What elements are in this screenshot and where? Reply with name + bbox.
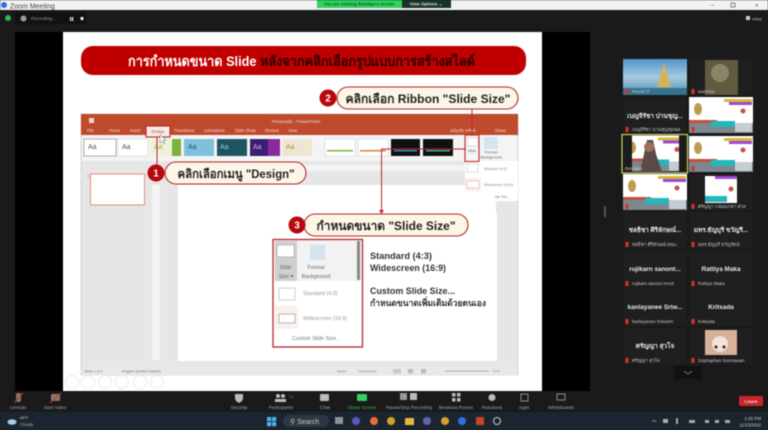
slide size explanation text — [370, 251, 486, 308]
Slide Size button highlight — [465, 135, 479, 162]
tile: active speaker Benidpa — [622, 134, 688, 173]
vertical ruler — [152, 185, 160, 360]
icon: Windows start — [267, 417, 276, 426]
tile: Rattiya Maka: Rattiya Maka — [698, 281, 725, 286]
slide size explanation text: Custom Slide Size... — [370, 286, 455, 296]
tile: wanvisa — [689, 59, 753, 95]
participant tiles — [622, 59, 753, 364]
ribbon with theme thumbnails — [82, 135, 517, 161]
search box — [283, 415, 329, 427]
icon: security: Security — [231, 405, 248, 410]
enlarged Slide Size menu: Custom Slide Size... — [292, 336, 341, 342]
icon: reactions — [482, 394, 503, 410]
tile: kanlayanee — [623, 289, 687, 326]
taskbar app icons — [335, 417, 500, 425]
callout 1: Design: คลิกเลือกเมนู "Design" — [178, 167, 294, 182]
tile: ศรัญญา — [623, 328, 687, 364]
slide size dropdown in PowerPoint — [465, 161, 518, 213]
callout 3: Slide Size: กำหนดขนาด "Slide Size" — [316, 219, 456, 233]
horizontal ruler — [178, 165, 466, 171]
tile: Kritsada — [689, 289, 753, 326]
icon: participants — [269, 394, 294, 410]
PowerPoint title bar: ธนัญชัย ทรัพย์ — [450, 128, 476, 133]
tile: Rattiya Maka — [689, 251, 753, 288]
leave button: Leave — [744, 399, 758, 404]
icon: pause stop recording — [386, 393, 432, 410]
tile: เบญจีรัชา: เบญจีรัชา ปานชุญ... — [627, 112, 683, 120]
window title bar — [0, 0, 768, 10]
icon: whiteboards: Whiteboards — [548, 405, 575, 410]
callout 2: Ribbon Slide Size: 2 — [325, 94, 331, 104]
icon: security — [231, 394, 248, 410]
PowerPoint title bar: Animations — [204, 128, 225, 133]
tile: Kritsada: Kritsada — [698, 319, 715, 324]
icon: unmute — [10, 393, 26, 410]
weather — [8, 415, 34, 427]
icon: participants: 71 — [289, 394, 294, 399]
tile: Rmutt IT: Rmutt IT — [632, 89, 650, 94]
tile: slide share 3 — [623, 174, 687, 210]
slide size dropdown in PowerPoint: Widescreen (16:9) — [484, 183, 513, 187]
tile: Rmutt IT — [623, 59, 687, 95]
icon: participants: Participants — [269, 405, 294, 410]
tile: เบญจีรัชา — [623, 97, 687, 133]
icon: pause stop recording: Pause/Stop Recording — [386, 405, 432, 410]
screen share banner: View Options ⌄ — [410, 2, 442, 6]
status bar: Comments — [358, 370, 376, 374]
slide size explanation text: Standard (4:3) — [370, 251, 432, 261]
PowerPoint title bar: View — [288, 128, 298, 133]
icon: chat: Chat — [320, 405, 331, 410]
connector lines — [157, 109, 472, 212]
icon: breakout rooms: Breakout Rooms — [439, 405, 474, 410]
clock: 1:25 PM — [745, 416, 761, 421]
status bar — [82, 367, 517, 375]
system tray — [652, 418, 730, 424]
icon: apps: Apps — [519, 405, 530, 410]
slide thumbnail pane — [87, 173, 144, 205]
shared screen letterbox — [15, 32, 206, 391]
PowerPoint window — [81, 114, 518, 375]
enlarged Slide Size menu: Standard (4:3) — [303, 291, 338, 297]
PowerPoint title bar — [81, 114, 518, 135]
callout 3: Slide Size: 3 — [294, 220, 300, 232]
clock: 11/23/2022 — [739, 422, 762, 428]
tile: kanlayanee: kanlayanee Sriw... — [628, 304, 683, 311]
callout 1: Design: 1 — [153, 168, 159, 180]
recording status bar: View — [752, 16, 763, 22]
ribbon with theme thumbnails: Background — [480, 154, 502, 160]
screen share banner — [317, 0, 451, 8]
tile: มทร.ธัญบุรี: มทร.ธัญบุรี ขวัญรี... — [694, 226, 748, 234]
slide thumbnail pane: 1 — [87, 173, 90, 178]
callout 2: Ribbon Slide Size — [320, 87, 518, 109]
tile: rujikarn: rujikarn sanont... — [629, 266, 681, 273]
tile: ศรัญญา: ศรัญญา สุวโจ — [636, 341, 674, 350]
tile: slide share 4 — [689, 174, 753, 210]
window title bar: Zoom Meeting — [10, 4, 55, 10]
presenter tools — [66, 376, 164, 388]
icon: reactions: Reactions — [482, 405, 503, 410]
tile: ชลธิชา — [623, 212, 687, 248]
meeting toolbar — [0, 391, 768, 412]
icon: whiteboards — [548, 394, 575, 410]
tile: kanlayanee: kanlayanee Sriwarin — [632, 319, 674, 324]
clock — [739, 416, 762, 428]
Slide Size small label: Slide — [468, 149, 476, 153]
ribbon with theme thumbnails: Aa — [122, 144, 131, 151]
icon: share screen: Share Screen — [348, 405, 376, 410]
callout 1: Design — [148, 162, 306, 184]
icon: apps — [519, 394, 530, 410]
slide — [63, 32, 542, 391]
participants panel divider handle — [604, 206, 606, 217]
scroll down chevron — [674, 366, 702, 379]
tile: เบญจีรัชา: เบญจีรัชา ปานชุญชุมพล — [632, 126, 680, 133]
enlarged Slide Size menu: Widescreen (16:9) — [303, 316, 347, 322]
status bar: Slide 1 of 1 — [84, 370, 103, 374]
ribbon with theme thumbnails: Aa — [286, 144, 295, 151]
slide size explanation text: Widescreen (16:9) — [370, 263, 446, 273]
icon: breakout rooms — [439, 393, 474, 410]
status bar: 71% — [492, 370, 500, 374]
enlarged Slide Size menu — [273, 240, 362, 347]
PowerPoint title bar: Home — [109, 128, 121, 133]
tile: Kritsada: Kritsada — [708, 304, 734, 311]
icon: start video: Start Video — [44, 405, 67, 410]
PowerPoint title bar: File — [87, 128, 94, 133]
icon: start video — [44, 393, 67, 410]
tile: ชลธิชา: ชลธิชา ศิริลักษณ์... — [629, 226, 682, 234]
slide size explanation text: กำหนดขนาดเพิ่มเติมด้วยตนเอง — [370, 296, 486, 308]
ribbon with theme thumbnails: Format — [485, 150, 498, 154]
tile: slide share 2 — [689, 136, 753, 172]
tile: Sophaphan — [689, 328, 753, 364]
tile: มทร.ธัญบุรี: มทร.ธัญบุรี ขวัญรัตน์ — [698, 241, 740, 248]
slide title banner — [81, 46, 526, 75]
icon: share screen — [348, 394, 376, 410]
weather: 68°F — [20, 415, 29, 420]
tile: rujikarn: rujikarn sanont rmutt — [632, 281, 675, 286]
weather: Cloudy — [20, 422, 34, 427]
ribbon with theme thumbnails: Aa — [188, 144, 197, 151]
tile: ชลธิชา: ชลธิชา ศิริลักษณ์ คณะ — [632, 241, 678, 247]
callout 3: Slide Size — [288, 214, 468, 236]
enlarged Slide Size menu: Background — [302, 274, 330, 280]
slide title banner: การกำหนดขนาด Slide หลังจากคลิกเลือกรูปแบบการสร้างสไลด์ — [128, 52, 475, 70]
screen share banner: You are viewing Benidpa's screen — [324, 2, 395, 6]
ribbon with theme thumbnails: Aa — [220, 144, 229, 151]
tile: Sophaphan: Sophaphan Somsasan — [698, 358, 745, 363]
ribbon with theme thumbnails: Aa — [253, 144, 262, 151]
icon: chat — [320, 394, 331, 410]
window title bar: × — [755, 4, 759, 10]
leave button — [739, 396, 763, 406]
status bar: English (United States) — [122, 370, 162, 374]
PowerPoint title bar: Transitions — [174, 128, 194, 133]
enlarged Slide Size menu: Size ▾ — [279, 274, 294, 280]
PowerPoint title bar: Share — [495, 128, 507, 133]
tile: slide share 1 — [689, 97, 753, 133]
ribbon with theme thumbnails: Aa — [88, 144, 97, 151]
tile: rujikarn — [623, 251, 687, 288]
Design tab highlight: Design — [151, 129, 165, 134]
PowerPoint title bar: Insert — [130, 128, 141, 133]
muted mic badges — [626, 89, 694, 363]
enlarged Slide Size menu: Format — [307, 265, 325, 271]
callout 2: Ribbon Slide Size: คลิกเลือก Ribbon "Slide Size" — [346, 92, 510, 106]
Design tab highlight — [146, 126, 170, 144]
icon: unmute: Unmute — [10, 405, 26, 410]
tile: ศรัญญา: ศรัญญา สุวโจ — [632, 357, 660, 364]
tile: มทร.ธัญบุรี — [689, 212, 753, 248]
window title bar: – — [711, 3, 715, 9]
slide size dropdown in PowerPoint: Standard (4:3) — [484, 167, 507, 171]
status bar: Notes — [337, 370, 347, 374]
PowerPoint title bar: Slide Show — [235, 128, 257, 133]
PowerPoint title bar: Review — [265, 128, 280, 133]
search box: ⚲ Search — [290, 418, 319, 426]
recording status bar — [0, 10, 768, 31]
recording status bar: Recording... — [31, 16, 56, 21]
enlarged Slide Size menu: Slide — [280, 265, 292, 271]
slide size dropdown in PowerPoint: Ide Tire... — [495, 195, 510, 199]
tile: slide share 4: ศรัญญา กล่อมเกลา สวล — [698, 203, 746, 210]
PowerPoint title bar: Personal2 - PowerPoint — [272, 119, 321, 124]
tile: active speaker Benidpa: Benidpa — [625, 166, 642, 171]
ribbon with theme thumbnails: Aa — [154, 144, 163, 151]
tile: Rattiya Maka: Rattiya Maka — [701, 266, 741, 273]
tile: wanvisa: wanvisa — [698, 89, 715, 94]
slide canvas — [178, 185, 497, 361]
Windows taskbar — [0, 412, 768, 430]
